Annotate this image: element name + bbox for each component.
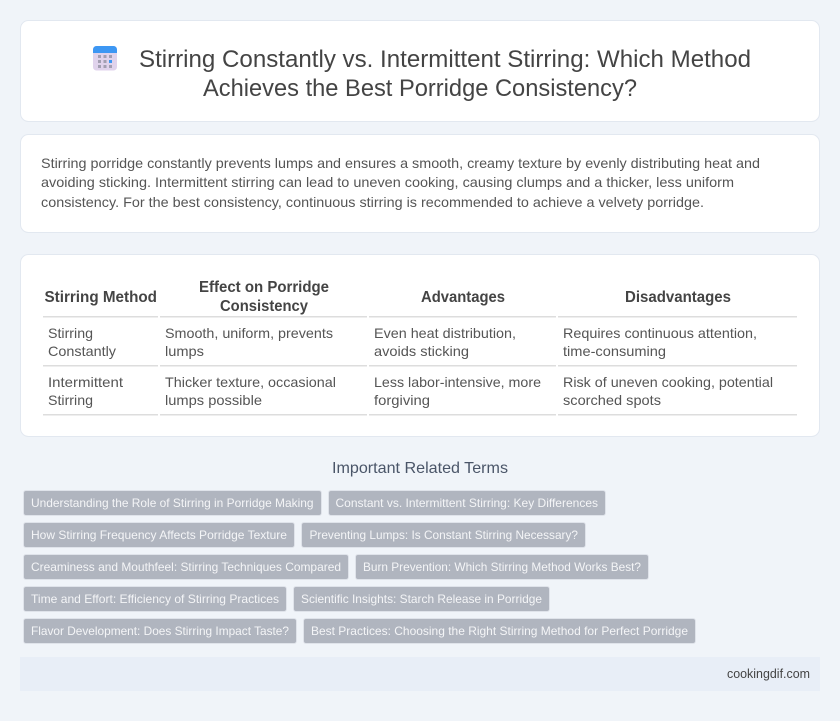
- table row: stirring constantly: Stirring: [48, 325, 93, 341]
- heading: important related terms: Important Related Terms: [332, 460, 508, 477]
- chip: [302, 522, 586, 548]
- chip: [24, 490, 322, 516]
- table header row: Disadvantages: [625, 289, 731, 306]
- chip: How Stirring Frequency Affects Porridge Texture: [31, 528, 287, 542]
- title: Achieves the Best Porridge Consistency?: [203, 75, 637, 102]
- intro paragraph: avoiding sticking. Intermittent stirring can lead to uneven cooking, causing clumps and a thicker, less uniform: [41, 174, 734, 190]
- chip: [356, 554, 648, 580]
- table header row: Stirring Method: [44, 289, 157, 306]
- panel: intro text card: [20, 134, 820, 232]
- intro paragraph: consistency. For the best consistency, continuous stirring is recommended to achieve a velvety porridge.: [41, 194, 704, 210]
- table row: intermittent stirring: [48, 374, 773, 408]
- table row: intermittent stirring: Stirring: [48, 392, 93, 408]
- chip: Burn Prevention: Which Stirring Method Works Best?: [363, 560, 641, 574]
- chip: Preventing Lumps: Is Constant Stirring Necessary?: [310, 528, 578, 542]
- chip: Scientific Insights: Starch Release in Porridge: [301, 592, 542, 606]
- table row: intermittent stirring: Thicker texture, occasional: [165, 374, 336, 390]
- table header row: Advantages: [421, 289, 505, 306]
- intro paragraph: Stirring porridge constantly prevents lumps and ensures a smooth, creamy texture by evenly distributing heat and: [41, 155, 760, 171]
- table row: stirring constantly: [48, 325, 757, 359]
- panel: comparison table card: [20, 254, 820, 436]
- chip: Time and Effort: Efficiency of Stirring Practices: [31, 592, 279, 606]
- table row: stirring constantly: time-consuming: [563, 343, 666, 359]
- chip: [24, 554, 348, 580]
- chip: [24, 586, 286, 612]
- table row: intermittent stirring: Intermittent: [48, 374, 123, 390]
- chip: [24, 618, 296, 644]
- footer bar: [20, 657, 820, 691]
- footer bar: cookingdif.com: [727, 666, 810, 681]
- chip: Best Practices: Choosing the Right Stirring Method for Perfect Porridge: [311, 624, 688, 638]
- chip: Constant vs. Intermittent Stirring: Key Differences: [336, 496, 598, 510]
- table row: intermittent stirring: lumps possible: [165, 392, 262, 408]
- table header row: [44, 279, 731, 315]
- chip: [24, 522, 294, 548]
- intro paragraph: [41, 155, 760, 210]
- chip: Creaminess and Mouthfeel: Stirring Techniques Compared: [31, 560, 341, 574]
- table row: intermittent stirring: scorched spots: [563, 392, 661, 408]
- icon: calendar grid: [93, 46, 117, 70]
- chip: [294, 586, 550, 612]
- chip: [328, 490, 606, 516]
- table row: stirring constantly: Even heat distribution,: [374, 325, 516, 341]
- chip: Flavor Development: Does Stirring Impact Taste?: [31, 624, 289, 638]
- title: Stirring Constantly vs. Intermittent Stirring: Which Method: [139, 46, 751, 73]
- table header row: Consistency: [220, 298, 308, 315]
- panel: header card: [20, 20, 820, 122]
- chip: Understanding the Role of Stirring in Porridge Making: [31, 496, 314, 510]
- table row: intermittent stirring: forgiving: [374, 392, 430, 408]
- table header row: Effect on Porridge: [199, 279, 329, 296]
- chip: [304, 618, 696, 644]
- table row: intermittent stirring: Risk of uneven cooking, potential: [563, 374, 773, 390]
- table row: stirring constantly: Constantly: [48, 343, 116, 359]
- table row: stirring constantly: Requires continuous attention,: [563, 325, 757, 341]
- table row: intermittent stirring: Less labor-intensive, more: [374, 374, 541, 390]
- table row: stirring constantly: lumps: [165, 343, 204, 359]
- table row: stirring constantly: avoids sticking: [374, 343, 469, 359]
- table row: stirring constantly: Smooth, uniform, prevents: [165, 325, 333, 341]
- title: [139, 46, 751, 102]
- panel: related term chips: [24, 490, 696, 644]
